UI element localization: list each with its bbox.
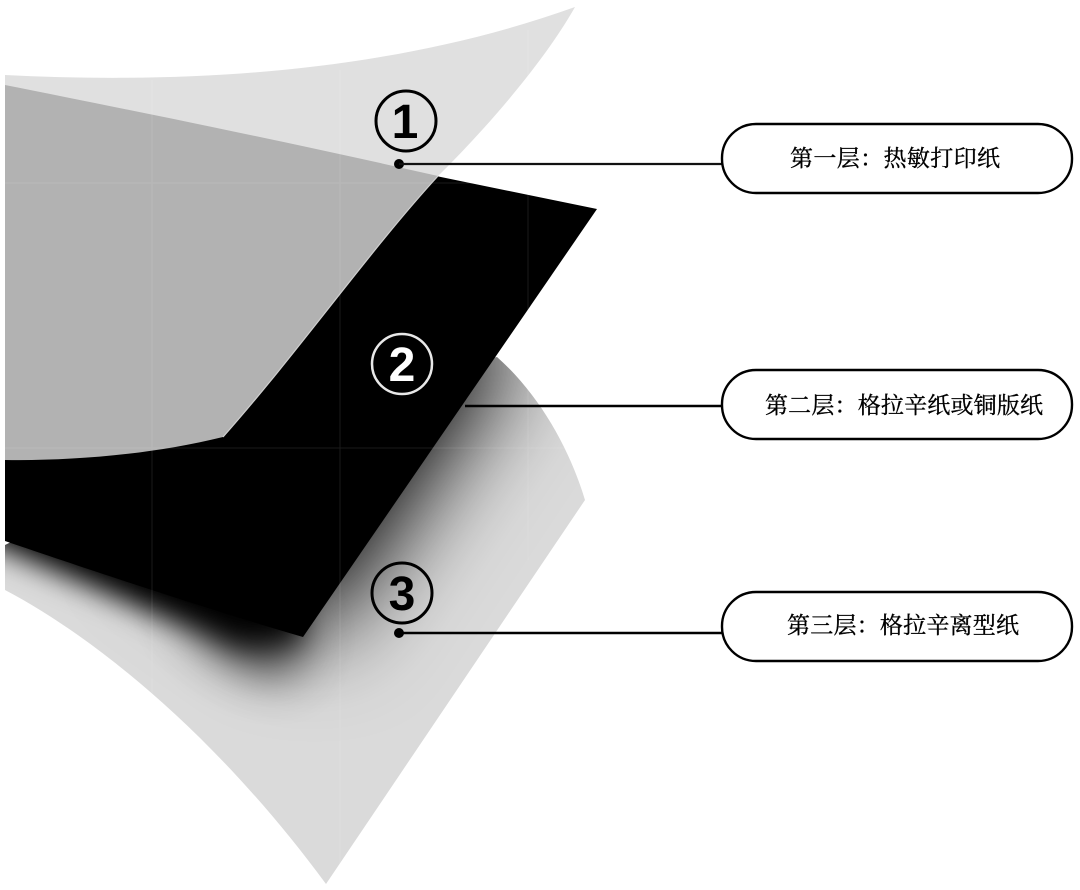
marker 1: 1	[392, 96, 418, 149]
sheet 1 back flap	[5, 7, 575, 178]
marker 1	[376, 91, 436, 151]
sheet 1 light edge	[223, 176, 438, 437]
marker 2	[372, 334, 432, 394]
leader line 2	[465, 405, 722, 407]
marker 3: 3	[389, 568, 415, 621]
callout: layer 2: 第二层：格拉辛纸或铜版纸	[765, 393, 1043, 418]
marker 2: 2	[389, 339, 415, 392]
leader line 1	[394, 159, 722, 169]
leader line 3	[394, 628, 722, 638]
callout: layer 1	[722, 124, 1072, 193]
sheet 1: thermal paper	[5, 85, 438, 460]
illustration: layered label sheets	[0, 7, 597, 884]
marker 3	[372, 563, 432, 623]
callout: layer 2	[722, 370, 1072, 439]
callout: layer 3	[722, 592, 1072, 661]
callout: layer 1: 第一层：热敏打印纸	[790, 146, 1000, 171]
sheet 2: glassine or coated paper	[5, 176, 597, 637]
callout: layer 3: 第三层：格拉辛离型纸	[787, 613, 1019, 638]
sheet 3: release paper	[5, 357, 585, 884]
